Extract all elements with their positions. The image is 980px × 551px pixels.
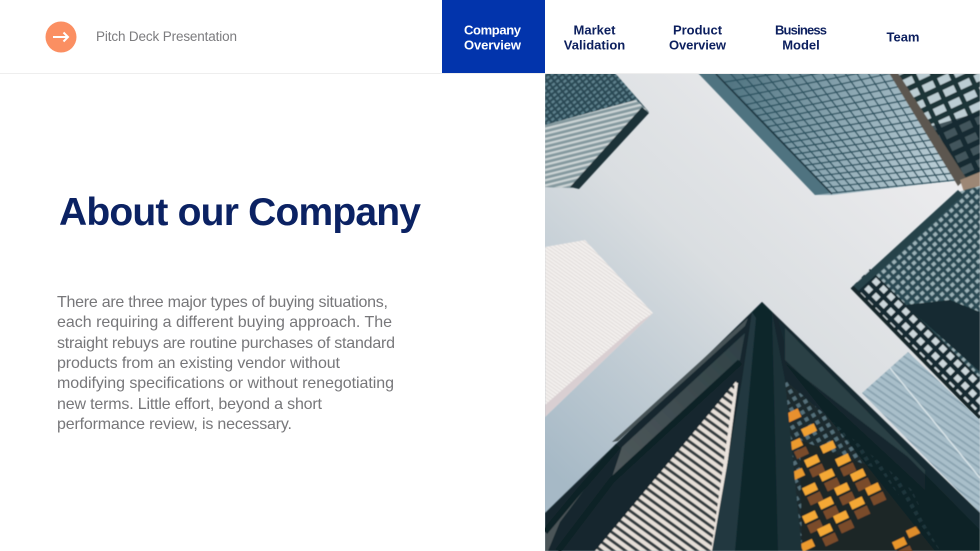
body paragraph: each requiring a different buying approach. The <box>57 314 392 331</box>
building: pale blue tower <box>862 352 980 513</box>
left beam top strip <box>612 318 748 442</box>
tab: product overview: Overview <box>669 38 727 52</box>
left beam edge lines <box>558 362 740 551</box>
tab: market validation: Market <box>574 22 616 38</box>
building: white tower <box>545 240 653 417</box>
title: About our Company <box>59 191 421 234</box>
tab: market validation: Validation <box>564 38 625 52</box>
tab: business model: Model <box>782 38 820 52</box>
header bar <box>0 0 980 74</box>
active tab: company overview: Company <box>464 22 522 38</box>
building: top-left tower <box>545 73 649 189</box>
orange lit cells <box>785 408 920 551</box>
body paragraph: new terms. Little effort, beyond a short <box>57 396 323 413</box>
striped reflection window <box>595 380 737 551</box>
body paragraph: performance review, is necessary. <box>57 416 292 433</box>
building: top-centre tower <box>698 73 980 195</box>
body paragraph: modifying specifications or without renegotiating <box>57 375 394 392</box>
brown cells under orange cells <box>794 446 913 551</box>
photo: skyscrapers seen from below <box>545 73 980 551</box>
central column <box>735 302 778 551</box>
body paragraph: straight rebuys are routine purchases of standard <box>57 335 395 352</box>
right beam <box>926 460 980 513</box>
tab: business model: Business <box>775 22 827 38</box>
body paragraph: products from an existing vendor without <box>57 355 341 372</box>
mesh window <box>785 380 940 551</box>
white mullion <box>711 383 738 551</box>
foreground: dark glass corner tower <box>545 302 980 551</box>
tab: product overview <box>669 22 727 52</box>
deck label: Pitch Deck Presentation <box>96 29 237 44</box>
active tab: company overview <box>442 0 545 73</box>
building: right tower <box>852 186 980 420</box>
tab: business model <box>775 22 827 52</box>
active tab: company overview: Overview <box>464 38 522 52</box>
body paragraph <box>57 294 395 433</box>
tab: market validation <box>564 22 625 52</box>
left beam panel <box>612 333 745 477</box>
body paragraph: There are three major types of buying situations, <box>57 294 388 311</box>
icon: orange arrow circle <box>46 22 76 52</box>
lower-left beam panel <box>545 489 585 551</box>
tab: team: Team <box>886 30 920 44</box>
dark lower window <box>800 440 940 551</box>
tab: product overview: Product <box>673 22 723 38</box>
